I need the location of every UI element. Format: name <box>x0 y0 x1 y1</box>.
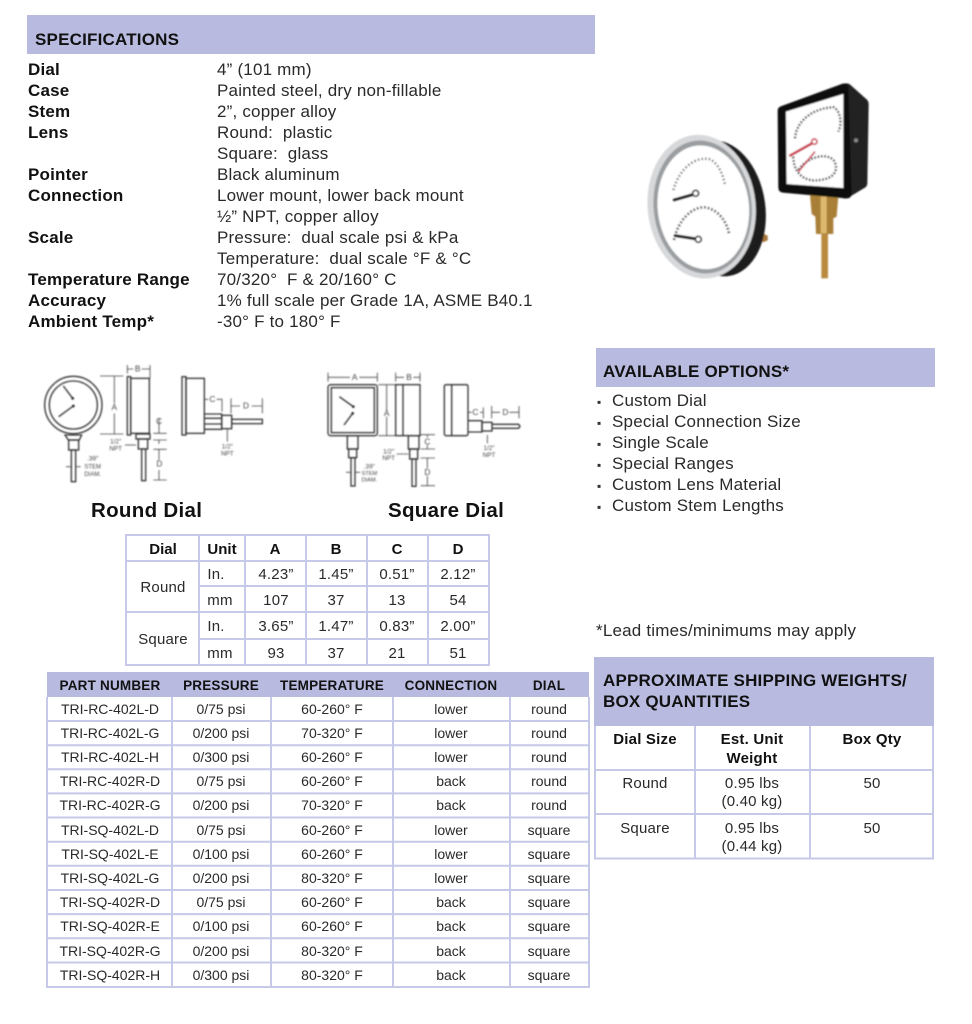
diagram: square dial: STEM <box>361 471 377 477</box>
table: part numbers: round <box>531 701 567 717</box>
table: part numbers: 0/200 psi <box>193 725 249 741</box>
specification values: Painted steel, dry non-fillable <box>217 81 442 100</box>
icon: round gauge <box>640 129 774 284</box>
specification values: Pressure: dual scale psi & kPa <box>217 228 459 247</box>
table: part numbers: square <box>528 918 571 934</box>
table: shipping weights: Box Qty <box>843 731 902 748</box>
table: part numbers: back <box>436 894 467 910</box>
table: shipping weights: 50 <box>863 820 881 837</box>
diagram: round dial: .39" <box>87 456 99 463</box>
table: shipping weights: 0.95 lbs <box>725 820 779 837</box>
specification labels: Pointer <box>28 165 88 184</box>
table: part numbers: 0/100 psi <box>193 846 249 862</box>
table: part numbers <box>47 672 589 987</box>
table: part numbers: 60-260° F <box>301 701 363 717</box>
table: part numbers: TRI-RC-402R-G <box>59 797 161 813</box>
table: dial dimensions: In. <box>207 566 225 583</box>
table: part numbers: 80-320° F <box>301 870 363 886</box>
table: part numbers: 0/200 psi <box>193 797 249 813</box>
table: dial dimensions: 3.65” <box>258 618 294 635</box>
table: part numbers: square <box>528 943 571 959</box>
table: part numbers: TRI-SQ-402R-H <box>60 967 160 983</box>
table: part numbers: TRI-SQ-402L-E <box>61 846 159 862</box>
diagram: square dial <box>328 372 520 486</box>
specification values: 70/320° F & 20/160° C <box>217 270 397 289</box>
table: dial dimensions: Round <box>140 579 186 596</box>
specification values: Temperature: dual scale °F & °C <box>217 249 471 268</box>
table: part numbers: lower <box>434 846 468 862</box>
specification labels: Temperature Range <box>28 270 190 289</box>
product photo: round and square gauges <box>640 83 869 284</box>
footnote: lead times: *Lead times/minimums may apply <box>596 621 856 640</box>
specification values <box>217 60 533 331</box>
table: part numbers: TRI-SQ-402L-D <box>61 822 159 838</box>
table: part numbers: square <box>528 894 571 910</box>
table: shipping weights: Weight <box>727 750 777 767</box>
icon: square gauge <box>778 83 869 278</box>
table: dial dimensions: 0.83” <box>379 618 415 635</box>
specification values: Black aluminum <box>217 165 340 184</box>
diagram: square dial: D <box>502 407 508 417</box>
table: part numbers: 70-320° F <box>301 797 363 813</box>
table: part numbers: back <box>436 967 467 983</box>
diagram: round dial: D <box>243 401 249 411</box>
diagram: round dial: C <box>209 394 215 404</box>
table: part numbers: 0/200 psi <box>193 943 249 959</box>
diagram: square dial: 1/2" <box>383 448 394 455</box>
table: part numbers: lower <box>434 725 468 741</box>
diagram: square dial: B <box>406 372 412 382</box>
specification values: Round: plastic <box>217 123 333 142</box>
caption: round dial: Round Dial <box>91 499 202 522</box>
diagram: round dial: A <box>112 402 118 412</box>
specification labels: Case <box>28 81 69 100</box>
table: part numbers: 70-320° F <box>301 725 363 741</box>
table: part numbers: round <box>531 725 567 741</box>
table: dial dimensions: Unit <box>207 541 237 558</box>
table: part numbers: back <box>436 918 467 934</box>
table: dial dimensions: 107 <box>263 592 289 609</box>
heading: specifications <box>27 15 595 54</box>
table: part numbers: lower <box>434 822 468 838</box>
specification values: 4” (101 mm) <box>217 60 312 79</box>
specification values: Square: glass <box>217 144 328 163</box>
options list: Custom Stem Lengths <box>612 496 784 515</box>
table: dial dimensions: B <box>331 541 342 558</box>
table: part numbers: square <box>528 846 571 862</box>
table: part numbers: PART NUMBER <box>60 678 161 693</box>
diagram: round dial: B <box>135 364 141 374</box>
table: dial dimensions: Dial <box>149 541 177 558</box>
specification values: -30° F to 180° F <box>217 312 341 331</box>
table: dial dimensions: 1.47” <box>318 618 354 635</box>
options list: Single Scale <box>612 433 709 452</box>
table: part numbers: round <box>531 797 567 813</box>
specification values: ½” NPT, copper alloy <box>217 207 379 226</box>
table: part numbers: 0/200 psi <box>193 870 249 886</box>
table: part numbers: back <box>436 773 467 789</box>
diagram: square dial: NPT <box>483 452 495 459</box>
heading: shipping weights <box>594 657 934 726</box>
diagram: round dial: D <box>156 459 162 469</box>
diagram: square dial: DIAM. <box>361 478 378 484</box>
table: dial dimensions: Square <box>138 631 188 648</box>
table: part numbers: 60-260° F <box>301 773 363 789</box>
table: part numbers: TRI-RC-402L-D <box>61 701 159 717</box>
specification values: Lower mount, lower back mount <box>217 186 464 205</box>
table: part numbers: square <box>528 822 571 838</box>
table: part numbers: round <box>531 749 567 765</box>
table: part numbers: 60-260° F <box>301 749 363 765</box>
options list: Special Connection Size <box>612 412 801 431</box>
panel: shipping weights and box quantities <box>594 657 934 858</box>
heading: shipping weights: BOX QUANTITIES <box>603 692 750 711</box>
table: part numbers: square <box>528 967 571 983</box>
table: part numbers: TRI-SQ-402R-E <box>60 918 160 934</box>
diagram: round dial: NPT <box>221 451 234 458</box>
table: part numbers: TRI-RC-402L-G <box>61 725 159 741</box>
table: dial dimensions: 37 <box>327 592 345 609</box>
options list: ▪ <box>597 437 601 451</box>
table: dial dimensions: D <box>453 541 464 558</box>
specification labels: Accuracy <box>28 291 106 310</box>
table: dial dimensions: 37 <box>327 645 345 662</box>
table: part numbers: round <box>531 773 567 789</box>
specification labels: Connection <box>28 186 124 205</box>
table: part numbers: 80-320° F <box>301 943 363 959</box>
table: part numbers: 60-260° F <box>301 822 363 838</box>
table: part numbers: 80-320° F <box>301 967 363 983</box>
table: part numbers: square <box>528 870 571 886</box>
table: shipping weights <box>595 726 933 858</box>
options list: ▪ <box>597 395 601 409</box>
table: dial dimensions: 21 <box>388 645 406 662</box>
panel: round dial dimension drawing <box>45 364 262 522</box>
table: shipping weights: Round <box>622 775 668 792</box>
table: dial dimensions: C <box>392 541 403 558</box>
table: part numbers: DIAL <box>533 678 565 693</box>
table: part numbers: 0/300 psi <box>193 967 249 983</box>
options list <box>597 391 801 515</box>
heading: specifications: SPECIFICATIONS <box>35 30 179 49</box>
table: dial dimensions: 2.12” <box>440 566 476 583</box>
diagram: square dial: D <box>424 467 430 477</box>
diagram: square dial: C <box>472 407 478 417</box>
specification labels: Dial <box>28 60 60 79</box>
table: dial dimensions: 1.45” <box>318 566 354 583</box>
diagram: square dial: A <box>384 408 390 418</box>
table: part numbers: TEMPERATURE <box>280 678 384 693</box>
options list: Special Ranges <box>612 454 734 473</box>
table: dial dimensions: 54 <box>449 592 467 609</box>
table: part numbers: 60-260° F <box>301 918 363 934</box>
table: shipping weights: Square <box>620 820 670 837</box>
options list: Custom Dial <box>612 391 707 410</box>
panel: available options <box>596 348 935 640</box>
options list: ▪ <box>597 416 601 430</box>
table: part numbers: 0/300 psi <box>193 749 249 765</box>
diagram: square dial: C <box>424 436 430 446</box>
diagram: round dial: 1/2" <box>222 443 233 450</box>
heading: available options: AVAILABLE OPTIONS* <box>603 362 789 381</box>
specification labels: Stem <box>28 102 70 121</box>
diagram: square dial: .39" <box>364 463 375 470</box>
table: part numbers: 60-260° F <box>301 846 363 862</box>
table: shipping weights: Dial Size <box>613 731 677 748</box>
table: part numbers: TRI-SQ-402R-D <box>60 894 160 910</box>
diagram: round dial: 1/2" <box>110 438 121 445</box>
caption: square dial: Square Dial <box>388 499 504 522</box>
table: dial dimensions: mm <box>207 592 233 609</box>
options list: ▪ <box>597 458 601 472</box>
table: shipping weights: 0.95 lbs <box>725 775 779 792</box>
table: part numbers: 0/75 psi <box>196 894 246 910</box>
table: dial dimensions: 0.51” <box>379 566 415 583</box>
table: part numbers: 0/75 psi <box>196 701 246 717</box>
table: part numbers: 60-260° F <box>301 894 363 910</box>
table: dial dimensions: 13 <box>388 592 406 609</box>
options list: ▪ <box>597 500 601 514</box>
table: shipping weights: (0.44 kg) <box>722 838 782 855</box>
heading: available options <box>596 348 935 387</box>
diagram: round dial <box>45 364 262 482</box>
table: part numbers: lower <box>434 870 468 886</box>
specification values: 2”, copper alloy <box>217 102 337 121</box>
table: shipping weights: 50 <box>863 775 881 792</box>
table: dial dimensions: 51 <box>449 645 467 662</box>
table: part numbers: TRI-SQ-402R-G <box>59 943 161 959</box>
diagram: round dial: NPT <box>109 446 122 453</box>
table: dial dimensions: mm <box>207 645 233 662</box>
specification labels: Lens <box>28 123 68 142</box>
table: dial dimensions: 4.23” <box>258 566 294 583</box>
table: dial dimensions <box>126 535 489 665</box>
table: part numbers: CONNECTION <box>405 678 497 693</box>
table: dial dimensions: 2.00” <box>440 618 476 635</box>
panel: specifications <box>27 15 595 331</box>
specification values: 1% full scale per Grade 1A, ASME B40.1 <box>217 291 533 310</box>
table: part numbers: 0/75 psi <box>196 773 246 789</box>
heading: shipping weights: APPROXIMATE SHIPPING WEIGHTS/ <box>603 671 907 690</box>
table: part numbers: back <box>436 797 467 813</box>
table: part numbers: TRI-SQ-402L-G <box>61 870 159 886</box>
table: shipping weights: (0.40 kg) <box>722 793 782 810</box>
table: part numbers: 0/75 psi <box>196 822 246 838</box>
panel: square dial dimension drawing <box>328 372 520 522</box>
table: part numbers: TRI-RC-402L-H <box>61 749 159 765</box>
diagram: square dial: 1/2" <box>483 445 495 452</box>
diagram: round dial: DIAM. <box>84 472 101 478</box>
table: dial dimensions: 93 <box>267 645 285 662</box>
options list: Custom Lens Material <box>612 475 781 494</box>
diagram: round dial: STEM <box>84 464 101 470</box>
table: dial dimensions: In. <box>207 618 225 635</box>
specification labels <box>28 60 190 331</box>
table: part numbers: lower <box>434 701 468 717</box>
specification labels: Scale <box>28 228 73 247</box>
table: shipping weights: Est. Unit <box>721 731 783 748</box>
diagram: round dial: C <box>156 416 162 426</box>
table: part numbers: lower <box>434 749 468 765</box>
table: part numbers: TRI-RC-402R-D <box>60 773 160 789</box>
table: part numbers: 0/100 psi <box>193 918 249 934</box>
options list: ▪ <box>597 479 601 493</box>
table: part numbers: back <box>436 943 467 959</box>
table: part numbers: PRESSURE <box>183 678 259 693</box>
table: dial dimensions: A <box>270 541 281 558</box>
diagram: square dial: NPT <box>382 455 395 462</box>
diagram: square dial: A <box>352 372 358 382</box>
specification labels: Ambient Temp* <box>28 312 154 331</box>
